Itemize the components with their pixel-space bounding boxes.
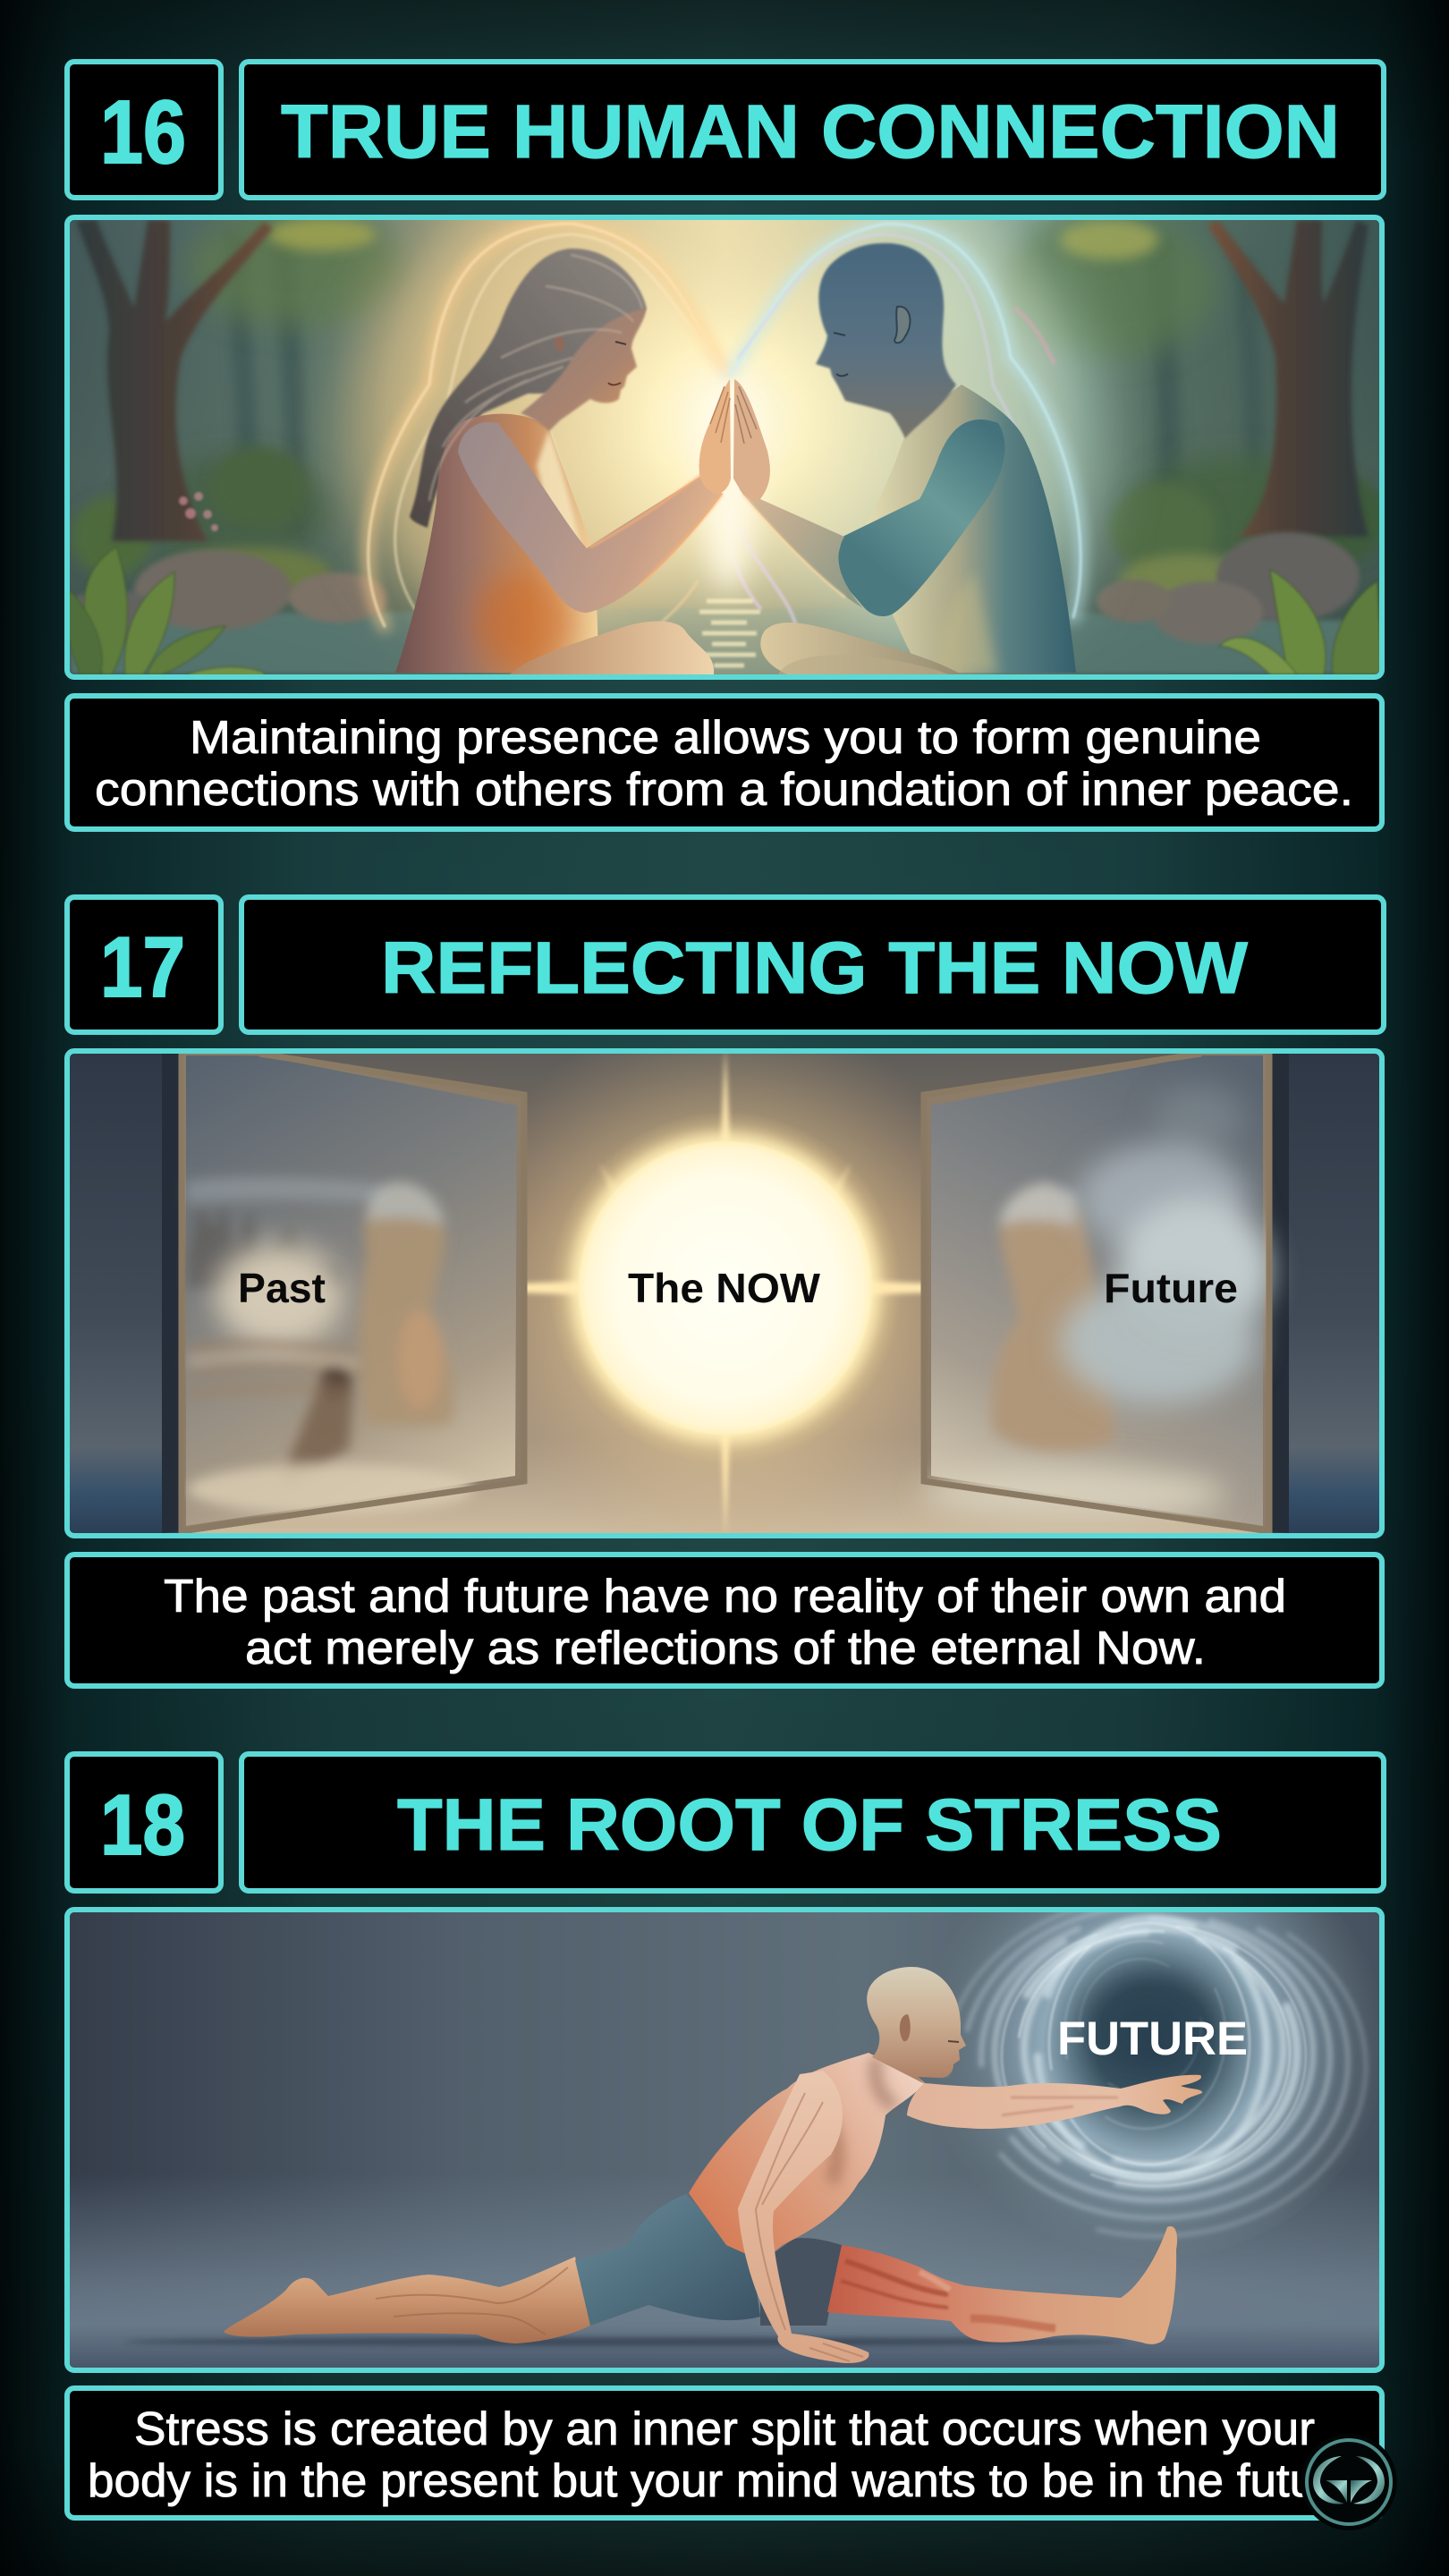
title banner: true human connection: TRUE HUMAN CONNECTION [281, 89, 1340, 174]
illustration frame 17 [67, 1051, 1382, 1536]
energy aura [349, 215, 1109, 674]
past reflection: skyline and figure [186, 1177, 453, 1426]
right mirror frame [924, 1054, 1269, 1531]
logo emblem [1313, 2456, 1385, 2504]
foreground leaves [67, 547, 1382, 676]
outstretched arm [907, 2075, 1202, 2129]
caption 16: connections with others from a foundation of inner peace. [95, 764, 1353, 816]
future vortex [921, 1829, 1386, 2258]
studio background [70, 1912, 1379, 2368]
title banner: reflecting the now [242, 897, 1384, 1032]
number box 16: 16 [100, 82, 186, 182]
woman legs [510, 622, 714, 674]
wall and floor [70, 1054, 1379, 1533]
number box 16 [67, 62, 221, 198]
label: future: Future [1104, 1265, 1238, 1311]
title banner: true human connection [242, 62, 1384, 198]
title banner: the root of stress: THE ROOT OF STRESS [397, 1784, 1222, 1866]
extended right leg with strained muscles [827, 2226, 1177, 2344]
right tree [1208, 220, 1368, 537]
section 17: reflecting the now [67, 897, 1384, 1686]
label: past: Past [238, 1265, 326, 1311]
woman torso [395, 414, 599, 673]
caption 17: act merely as reflections of the eternal Now. [245, 1623, 1206, 1674]
shorts [575, 2194, 760, 2326]
rocks and flowers [58, 492, 1360, 644]
woman hand [699, 379, 731, 494]
woman figure [395, 249, 731, 674]
head [867, 1967, 966, 2084]
number box 18 [67, 1754, 221, 1891]
label: future: FUTURE [1057, 2012, 1248, 2065]
caption 16: Maintaining presence allows you to form genuine [190, 712, 1261, 764]
man legs [760, 623, 962, 674]
left tree [76, 220, 273, 541]
title banner: the root of stress [242, 1754, 1384, 1891]
woman arm [458, 422, 723, 613]
caption 18: Stress is created by an inner split that occurs when your [134, 2403, 1315, 2455]
woman neck and face [521, 309, 646, 431]
stretching man [224, 1967, 1202, 2363]
number box 18: 18 [100, 1777, 185, 1873]
man torso [859, 385, 1076, 673]
caption 16 [67, 696, 1382, 829]
man forearm [742, 494, 863, 608]
caption 17: The past and future have no reality of their own and [164, 1571, 1286, 1623]
illustration: man split between body and future [70, 1829, 1386, 2368]
caption 18: body is in the present but your mind wants to be in the future. [88, 2455, 1371, 2507]
caption 17 [67, 1555, 1382, 1686]
label: the now: The NOW [628, 1265, 821, 1311]
left mirror frame [182, 1054, 524, 1531]
woman hair [410, 249, 647, 528]
future reflection: fog cloud [921, 1087, 1270, 1521]
section 16: true human connection [58, 62, 1386, 829]
sun glow and rays [386, 948, 1065, 1628]
illustration: mirrors and the sun [70, 948, 1379, 1628]
illustration frame 18 [67, 1910, 1382, 2370]
section 18: the root of stress [67, 1754, 1386, 2518]
woman hair strands [429, 255, 642, 501]
illustration: two people touching palms in a forest [58, 210, 1386, 676]
number box 17 [67, 897, 221, 1032]
support arm [738, 2071, 869, 2363]
past reflection: light behind label [215, 1243, 343, 1347]
far thigh shorts [760, 2238, 842, 2326]
left mirror: past [162, 1054, 524, 1533]
sun [572, 1134, 879, 1442]
logo badge [1301, 2434, 1397, 2530]
forest background [70, 210, 1386, 674]
man arm [834, 419, 1004, 616]
future reflection: figure [992, 1182, 1114, 1453]
illustration frame 16 [67, 217, 1382, 677]
man hand [733, 379, 770, 499]
past reflection: drifting fog [188, 1346, 474, 1514]
man figure [733, 243, 1076, 674]
caption 18 [67, 2388, 1382, 2518]
man head [816, 243, 956, 438]
title banner: reflecting the now: REFLECTING THE NOW [381, 928, 1249, 1009]
number box 17: 17 [100, 919, 185, 1015]
left leg [224, 2257, 590, 2343]
torso [689, 2053, 925, 2261]
right mirror: future [921, 1054, 1289, 1533]
